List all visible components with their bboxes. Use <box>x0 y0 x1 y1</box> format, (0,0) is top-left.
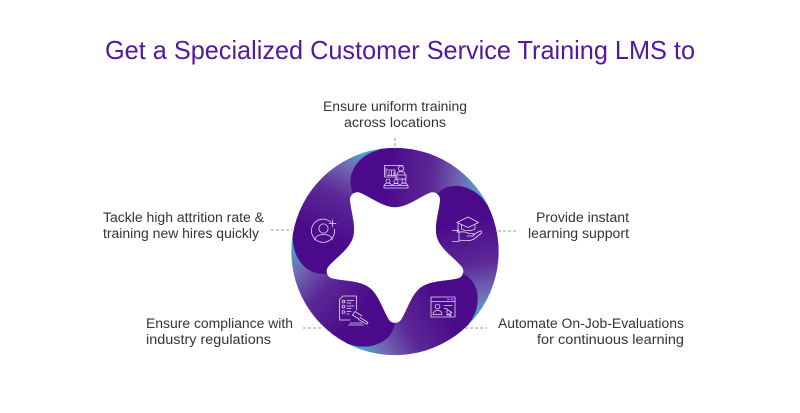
label: lower right: Automate On-Job-Evaluations <box>498 316 684 331</box>
label: lower right <box>498 316 684 347</box>
connector: left <box>271 229 292 231</box>
blade: top <box>350 148 488 207</box>
label: right: Provide instant <box>536 210 629 225</box>
blade: lower right <box>346 261 492 390</box>
title: Get a Specialized Customer Service Training LMS to <box>105 35 695 65</box>
label: top: across locations <box>344 115 446 130</box>
label: left <box>103 210 264 241</box>
blade: left <box>283 131 381 280</box>
icon: add user <box>311 219 336 242</box>
label: top: Ensure uniform training <box>323 99 467 114</box>
icon: classroom trainer <box>384 166 408 188</box>
blade: right <box>423 177 522 326</box>
label: lower left <box>146 316 293 347</box>
connector: top <box>394 138 396 148</box>
swirl ring <box>259 131 522 390</box>
label: right: learning support <box>528 226 629 241</box>
icon: graduation cap on hand <box>452 217 482 242</box>
label: left: training new hires quickly <box>103 226 259 241</box>
label: lower right: for continuous learning <box>537 332 684 347</box>
connector: lower right <box>465 327 487 329</box>
label: right <box>528 210 629 241</box>
label: lower left: industry regulations <box>146 332 271 347</box>
label: lower left: Ensure compliance with <box>146 316 293 331</box>
label: top <box>323 99 467 130</box>
label: left: Tackle high attrition rate & <box>103 210 264 225</box>
icon: compliance document and gavel <box>340 296 368 325</box>
blade: lower left <box>259 233 405 361</box>
connector: lower left <box>303 327 323 329</box>
icon: online evaluation window <box>431 297 455 317</box>
connector: right <box>498 230 517 232</box>
